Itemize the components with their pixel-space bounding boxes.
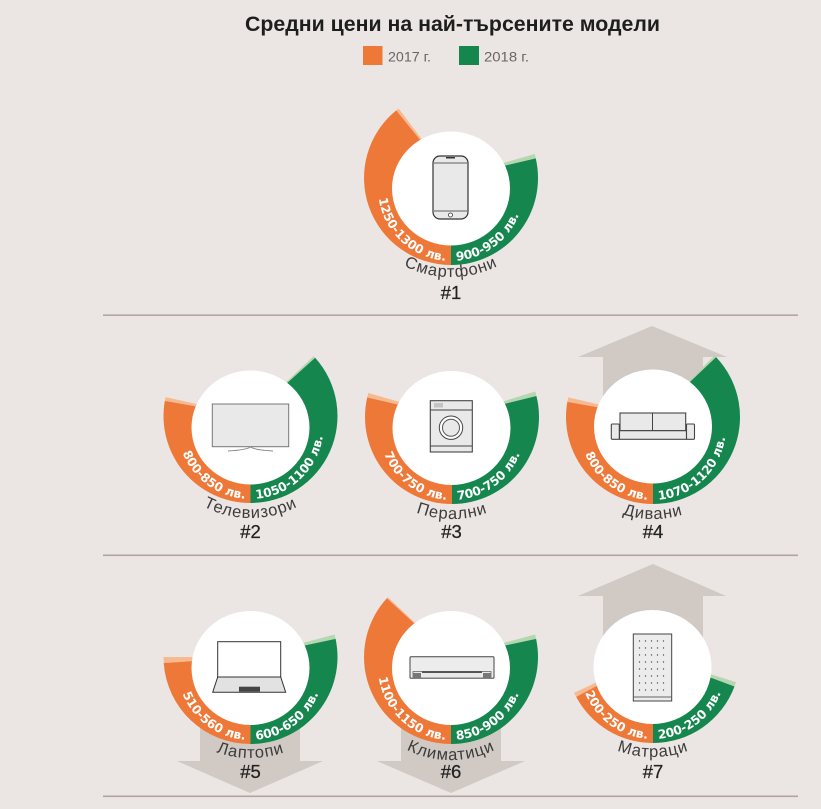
icon: sofa: [611, 413, 694, 439]
white disc: [192, 611, 310, 725]
title: Средни цени на най-търсените модели: [245, 12, 660, 36]
label: Смартфони: [406, 257, 496, 280]
icon: mattress: [633, 634, 672, 701]
price 2017: 800-850 лв.: [586, 452, 647, 500]
label: Перални: [417, 502, 486, 522]
rank: #3: [441, 521, 462, 542]
chart: washing machines: [365, 371, 539, 542]
rank: #1: [441, 282, 461, 303]
icon: TV: [212, 404, 289, 451]
rank: #5: [240, 761, 261, 782]
arrow down: laptops: [177, 725, 323, 793]
price 2017: 200-250 лв.: [585, 690, 647, 739]
white disc: [192, 370, 310, 484]
rank: #6: [441, 761, 461, 782]
price 2018: 600-650 лв.: [256, 694, 318, 740]
arrow down: air conditioners: [377, 725, 525, 793]
label: Лаптопи: [216, 742, 283, 758]
chart: air conditioners: [364, 597, 538, 793]
ring: laptops: [164, 634, 338, 744]
white disc: [392, 132, 510, 246]
price 2018: 200-250 лв.: [658, 693, 720, 739]
white disc: [392, 611, 510, 725]
price 2017: 1250-1300 лв.: [378, 198, 445, 261]
chart: mattresses: [574, 564, 736, 782]
white disc: [392, 371, 510, 485]
price 2018: 850-900 лв.: [456, 694, 518, 740]
arrow up: sofas: [578, 326, 727, 420]
icon: air conditioner: [410, 657, 494, 678]
rank: #2: [240, 521, 261, 542]
legend swatch: 2018: [459, 46, 479, 65]
label: Телевизори: [206, 496, 296, 518]
icon: washing machine: [430, 401, 472, 452]
chart: smartphones: [364, 108, 538, 303]
legend label: 2018: 2018 г.: [484, 48, 529, 64]
ring: mattresses: [574, 656, 736, 743]
white disc: [594, 610, 712, 724]
rank: #7: [643, 761, 663, 782]
ring: smartphones: [364, 109, 538, 265]
label: Климатици: [408, 740, 494, 760]
legend label: 2017: 2017 г.: [388, 48, 431, 64]
ring: air conditioners: [364, 597, 538, 744]
price 2017: 800-850 лв.: [184, 450, 244, 499]
ring: TVs: [163, 356, 337, 503]
label: Дивани: [622, 504, 682, 520]
ring: sofas: [566, 355, 740, 504]
price 2018: 1050-1100 лв.: [256, 437, 323, 499]
chart: TVs: [164, 356, 338, 542]
price 2017: 700-750 лв.: [384, 450, 446, 500]
label: Матраци: [618, 740, 687, 760]
price 2018: 900-950 лв.: [456, 215, 518, 261]
ring: washing machines: [365, 392, 539, 504]
legend swatch: 2017: [363, 46, 382, 65]
rank: #4: [643, 521, 663, 542]
icon: smartphone: [433, 156, 468, 219]
white disc: [594, 370, 712, 484]
price 2017: 510-560 лв.: [183, 691, 244, 740]
chart: sofas: [566, 326, 740, 542]
price 2018: 1070-1120 лв.: [658, 438, 726, 500]
arrow up: mattresses: [578, 564, 726, 650]
icon: laptop: [213, 642, 286, 692]
chart: laptops: [164, 611, 338, 793]
price 2018: 700-750 лв.: [457, 454, 520, 500]
price 2017: 1100-1150 лв.: [378, 677, 445, 740]
legend: [363, 46, 529, 65]
